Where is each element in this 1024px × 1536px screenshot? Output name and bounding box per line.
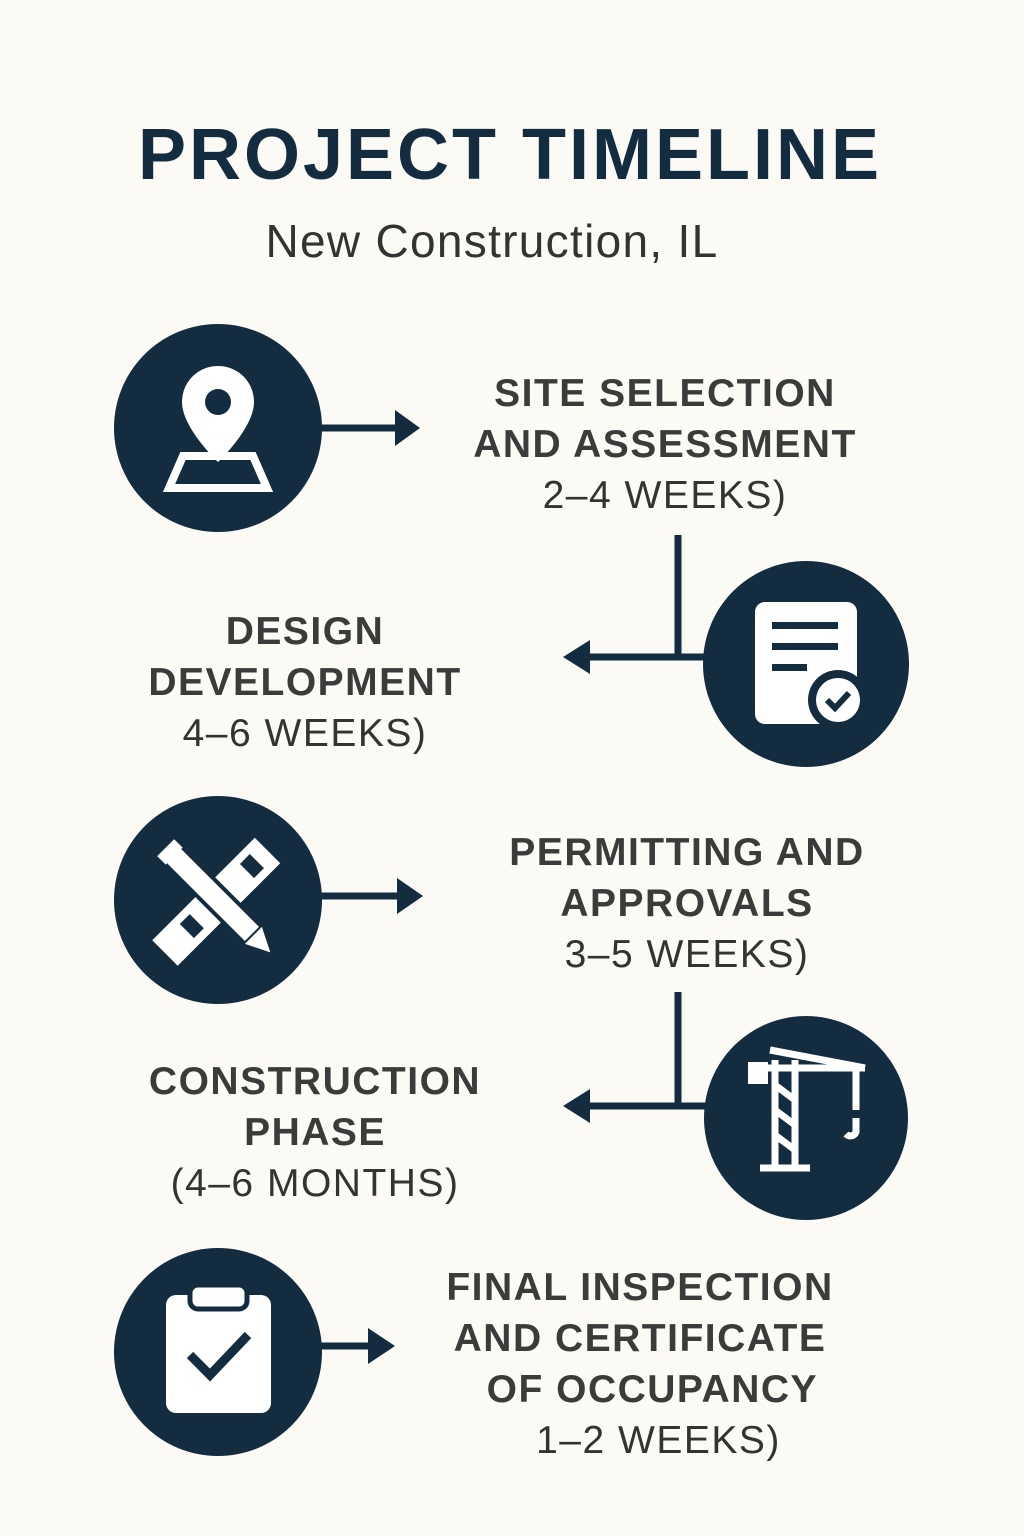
step 3 icon: pencil and ruler: [114, 796, 322, 1004]
step 2 text: [148, 610, 462, 755]
step 5 text: FINAL INSPECTION: [446, 1266, 834, 1309]
step 3 text: PERMITTING AND: [509, 831, 865, 874]
step 5 text: AND CERTIFICATE: [454, 1317, 826, 1360]
step 1 text: 2–4 WEEKS): [543, 474, 787, 517]
step 5 icon: clipboard check: [114, 1248, 322, 1456]
step 5 text: 1–2 WEEKS): [536, 1419, 781, 1462]
step 4 text: CONSTRUCTION: [149, 1060, 481, 1103]
arrow 3: [318, 878, 423, 914]
connector 1-2: [563, 535, 705, 674]
step 4 text: PHASE: [244, 1111, 386, 1154]
step 2 text: DESIGN: [226, 610, 384, 653]
step 1 text: [473, 372, 857, 517]
subtitle: New Construction, IL: [266, 215, 718, 267]
title: PROJECT TIMELINE: [138, 115, 882, 195]
step 2 text: 4–6 WEEKS): [183, 712, 427, 755]
step 3 text: 3–5 WEEKS): [565, 933, 809, 976]
step 3 text: [509, 831, 865, 976]
step 4 icon: crane: [704, 1016, 908, 1220]
step 1 text: SITE SELECTION: [494, 372, 836, 415]
step 5 text: OF OCCUPANCY: [487, 1368, 818, 1411]
step 1 text: AND ASSESSMENT: [473, 423, 857, 466]
step 4 text: (4–6 MONTHS): [171, 1162, 459, 1205]
arrow 5: [318, 1328, 395, 1364]
step 4 text: [149, 1060, 481, 1205]
connector 3-4: [563, 992, 710, 1123]
step 3 text: APPROVALS: [560, 882, 814, 925]
step 1 icon: location pin: [114, 324, 322, 532]
arrow 1: [318, 410, 420, 446]
step 2 text: DEVELOPMENT: [148, 661, 462, 704]
step 2 icon: document check: [703, 561, 909, 767]
step 5 text: [446, 1266, 834, 1462]
